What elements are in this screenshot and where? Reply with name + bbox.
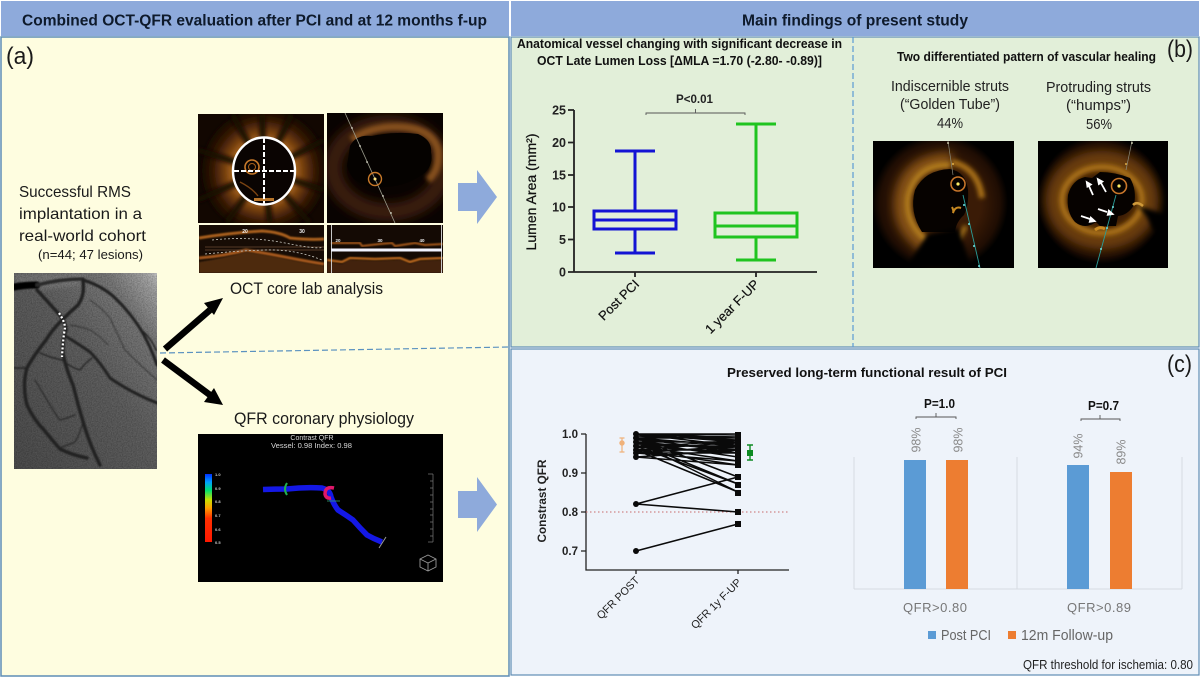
header: left: Combined OCT-QFR evaluation after PCI and at 12 months f-up — [22, 12, 487, 30]
chart: paired QFR values: 0.9 — [562, 468, 578, 480]
category labels — [903, 600, 1131, 615]
divider between anatomical and healing findings — [852, 37, 854, 347]
value labels: 98% — [910, 427, 924, 453]
significance bracket: P<0.01: P<0.01 — [676, 92, 713, 106]
image: humps OCT with arrows — [1038, 141, 1168, 268]
text: protruding struts: (“humps”) — [1066, 98, 1131, 114]
axis title: lumen area: Lumen Area (mm²) — [523, 134, 539, 250]
arrow: OCT to findings — [458, 170, 497, 224]
axis title: constrast QFR: Constrast QFR — [535, 459, 549, 542]
panel label (b): (b) — [1167, 36, 1193, 63]
image: coronary angiogram — [14, 273, 157, 469]
value labels: 89% — [1114, 439, 1128, 465]
header: right — [511, 1, 1199, 36]
text: indiscernible struts: (“Golden Tube”) — [900, 97, 1000, 113]
image: OCT longitudinal view with length bar: 20 — [335, 238, 341, 243]
text: successful RMS implantation: (n=44; 47 lesions) — [38, 248, 143, 262]
image: QFR 3D vessel reconstruction: 0.6 — [215, 527, 221, 532]
image: OCT longitudinal view with length bar — [327, 225, 443, 273]
text: protruding struts: Protruding struts — [1046, 80, 1151, 96]
chart: lumen area box plot: 20 — [552, 136, 566, 150]
arrow: angiogram to OCT — [165, 298, 223, 349]
text: indiscernible struts: Indiscernible struts — [891, 79, 1009, 95]
value labels — [910, 427, 1128, 465]
text: protruding struts: 56% — [1086, 117, 1112, 133]
mean marker: post — [620, 438, 624, 452]
chart: lumen area box plot: 25 — [552, 104, 566, 118]
image: QFR 3D vessel reconstruction: 0.8 — [215, 499, 221, 504]
text: successful RMS implantation — [19, 184, 147, 262]
chart: lumen area box plot — [523, 92, 817, 337]
text: successful RMS implantation: implantation in a — [19, 206, 142, 223]
text: indiscernible struts — [891, 79, 1009, 132]
chart: lumen area box plot: 15 — [552, 168, 566, 182]
significance bracket: P=1.0: P=1.0 — [924, 396, 955, 411]
heading: anatomical vessel changing: Anatomical vessel changing with significant decrease in — [517, 36, 842, 51]
image: QFR 3D vessel reconstruction: 0.9 — [215, 486, 221, 491]
axis label: QFR 1y F-UP: QFR 1y F-UP — [689, 577, 744, 632]
text: QFR coronary physiology: QFR coronary physiology — [234, 410, 415, 428]
significance bracket: P<0.01 — [646, 92, 745, 115]
value labels: 98% — [952, 427, 966, 453]
legend — [928, 627, 1113, 644]
threshold line at 0.80 — [586, 511, 789, 513]
text: successful RMS implantation: Successful RMS — [19, 184, 131, 201]
significance bracket: P=1.0 — [916, 396, 956, 419]
text: OCT core lab analysis: OCT core lab analysis — [230, 280, 383, 298]
chart: lumen area box plot: 10 — [552, 200, 566, 214]
chart: paired QFR values: 1.0 — [562, 429, 578, 441]
image: QFR 3D vessel reconstruction — [198, 434, 443, 582]
panel label (a): (a) — [6, 43, 34, 70]
panel (a): combined OCT-QFR evaluation — [1, 37, 509, 676]
post-PCI markers — [633, 431, 639, 554]
box: post PCI — [594, 151, 676, 253]
image: QFR 3D vessel reconstruction: 0.5 — [215, 540, 221, 545]
value labels: 94% — [1072, 433, 1086, 459]
image: QFR 3D vessel reconstruction: 1.0 — [215, 472, 221, 477]
image: golden tube OCT — [873, 141, 1014, 268]
image: OCT cross-section with measurement circle — [198, 114, 324, 223]
bars: QFR>0.89 — [1067, 465, 1132, 589]
image: QFR 3D vessel reconstruction: 0.7 — [215, 513, 221, 518]
image: OCT longitudinal view with length bar: 30 — [377, 238, 383, 243]
arrow: angiogram to QFR — [163, 360, 223, 405]
image: OCT longitudinal view with length bar: 40 — [419, 238, 425, 243]
axis label: QFR POST: QFR POST — [595, 574, 642, 622]
bars: QFR>0.80 — [904, 460, 968, 589]
legend: 12m Follow-up — [1021, 627, 1113, 644]
image: OCT lumen cross-section — [327, 113, 443, 223]
significance bracket: P=0.7: P=0.7 — [1088, 398, 1119, 413]
divider between OCT and QFR rows — [160, 347, 510, 353]
image: OCT longitudinal view with struts: 20 — [242, 229, 248, 235]
image: QFR 3D vessel reconstruction: Contrast QFR — [290, 435, 334, 442]
image: QFR 3D vessel reconstruction: Vessel: 0.98 Index: 0.98 — [271, 443, 352, 450]
header: left — [1, 1, 509, 36]
text: indiscernible struts: 44% — [937, 116, 963, 132]
heading: preserved long-term functional result: Preserved long-term functional result of PCI — [727, 365, 1007, 380]
chart: QFR bar chart — [854, 396, 1182, 644]
significance bracket: P=0.7 — [1081, 398, 1120, 421]
chart: lumen area box plot: 0 — [559, 266, 566, 280]
text: protruding struts — [1046, 80, 1151, 133]
category labels: QFR>0.89 — [1067, 600, 1131, 615]
arrows: white strut markers — [1081, 178, 1114, 222]
image: OCT longitudinal view with struts — [199, 225, 324, 273]
heading: anatomical vessel changing: OCT Late Lumen Loss [ΔMLA =1.70 (-2.80- -0.89)] — [537, 53, 822, 68]
axis label: 1 year F-UP: 1 year F-UP — [702, 277, 762, 337]
chart: paired QFR values: 0.8 — [562, 507, 579, 519]
text: successful RMS implantation: real-world cohort — [19, 228, 147, 245]
arrow: QFR to findings — [458, 477, 497, 532]
legend: Post PCI — [941, 627, 991, 644]
chart: lumen area box plot: 5 — [559, 233, 566, 247]
chart: paired QFR values: 0.7 — [562, 546, 578, 558]
header: right: Main findings of present study — [742, 12, 968, 30]
follow-up markers — [735, 432, 741, 527]
box: 1 year follow-up — [715, 124, 797, 260]
chart: paired QFR values — [535, 429, 789, 632]
image: OCT longitudinal view with struts: 30 — [299, 229, 305, 235]
axis label: post PCI: Post PCI — [595, 277, 642, 323]
paired patient lines — [636, 434, 738, 551]
heading: anatomical vessel changing — [517, 36, 842, 68]
mean marker: follow-up — [747, 445, 753, 460]
panel (c): functional result (blue) — [511, 349, 1199, 675]
heading: vascular healing patterns: Two differentiated pattern of vascular healing — [897, 50, 1156, 64]
panel label (c): (c) — [1167, 351, 1192, 378]
category labels: QFR>0.80 — [903, 600, 967, 615]
panel: main findings anatomy (green) — [511, 36, 1199, 347]
